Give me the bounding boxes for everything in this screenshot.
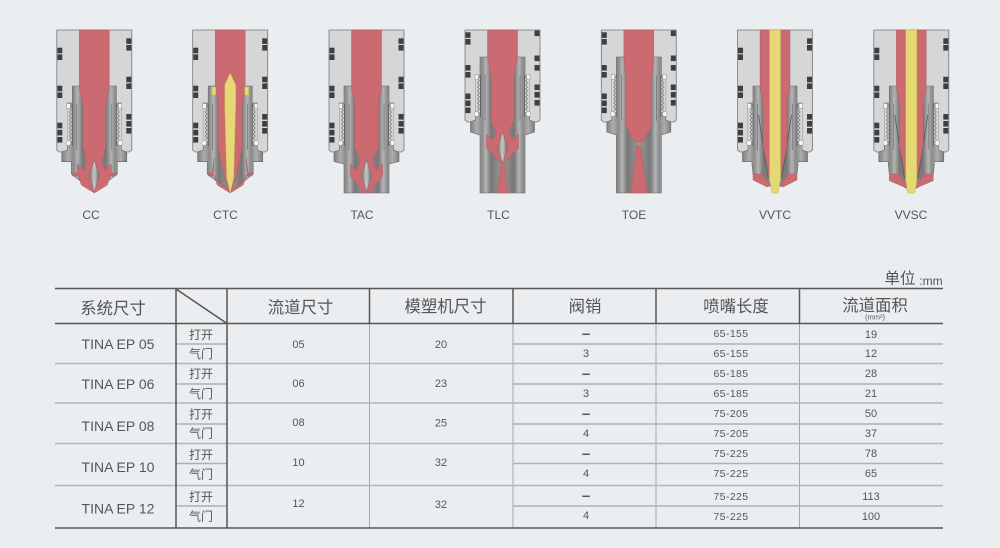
nozzle diagram: CTC [193, 30, 268, 193]
thread detail [883, 104, 940, 150]
table header: 模塑机尺寸 [405, 298, 486, 316]
unit note [884, 270, 943, 288]
nozzle body [607, 57, 671, 193]
thread detail [66, 104, 123, 150]
row: TINA EP 10: 4 [583, 468, 589, 480]
row: TINA EP 05: 12 [865, 348, 877, 360]
nozzle diagram: TAC [329, 30, 404, 193]
row: TINA EP 06: 28 [865, 368, 877, 380]
row: TINA EP 06: 65-185 [713, 368, 749, 380]
row: TINA EP 05: 20 [435, 339, 447, 351]
row: TINA EP 10: 78 [865, 448, 877, 460]
nozzle diagram: TOE [601, 30, 676, 193]
inner lines [895, 115, 928, 178]
torpedo [362, 160, 372, 191]
row: TINA EP 05: TINA EP 05 [82, 336, 155, 352]
row: TINA EP 05: 65-155 [713, 348, 749, 360]
row: TINA EP 08: 75-205 [713, 408, 749, 420]
table grid [55, 288, 943, 528]
melt channel [72, 30, 116, 193]
nozzle body [879, 86, 944, 188]
row: TINA EP 06: – [582, 366, 590, 382]
nozzle diagram: VVTC [738, 30, 812, 193]
valve pin [906, 30, 917, 193]
row: TINA EP 06 [82, 366, 877, 401]
melt channel [760, 30, 790, 178]
torpedo [498, 132, 508, 163]
housing [329, 30, 404, 152]
row: TINA EP 05: 气门 [189, 346, 213, 361]
tip right [914, 174, 933, 193]
nozzle body [470, 57, 534, 193]
thread detail [747, 104, 803, 150]
row: TINA EP 10: 32 [435, 457, 447, 469]
row: TINA EP 05 [82, 326, 877, 361]
thread detail [610, 74, 667, 121]
nozzle diagram: VVSC [874, 30, 949, 193]
row: TINA EP 05: 65-155 [713, 328, 749, 340]
label: TAC: TAC [350, 208, 374, 222]
row: TINA EP 10: 打开 [189, 448, 213, 462]
nozzle body [334, 86, 399, 193]
melt channel [896, 30, 926, 178]
row: TINA EP 12: 75-225 [713, 491, 749, 503]
tip left [753, 174, 770, 187]
label: TLC: TLC [487, 208, 510, 222]
row: TINA EP 06: 21 [865, 388, 877, 400]
row: TINA EP 12 [82, 488, 880, 524]
row: TINA EP 12: 气门 [189, 508, 213, 524]
row: TINA EP 08: – [582, 406, 590, 422]
row: TINA EP 08 [82, 406, 877, 440]
housing [601, 30, 676, 122]
tip right [780, 174, 797, 187]
housing [193, 30, 268, 152]
row: TINA EP 10: 气门 [189, 466, 213, 482]
row: TINA EP 08: 08 [292, 417, 305, 429]
table header: 阀销 [569, 298, 601, 316]
row: TINA EP 10: – [582, 446, 590, 462]
row: TINA EP 08: 50 [865, 408, 877, 420]
row: TINA EP 05: 打开 [189, 328, 213, 342]
row: TINA EP 12: 12 [292, 498, 305, 510]
row: TINA EP 12: 4 [583, 510, 589, 522]
label: VVTC: VVTC [759, 208, 791, 222]
melt channel [215, 30, 245, 192]
melt channel [350, 30, 382, 193]
label: VVSC: VVSC [895, 208, 928, 222]
row: TINA EP 05: 19 [865, 329, 877, 341]
row: TINA EP 06: TINA EP 06 [82, 376, 155, 392]
thread detail [338, 104, 395, 150]
torpedo [89, 160, 99, 192]
row: TINA EP 12: TINA EP 12 [82, 500, 155, 516]
row: TINA EP 10: 75-225 [713, 448, 749, 460]
table header: 喷嘴长度 [703, 298, 769, 316]
label: CC: CC [82, 208, 100, 222]
row: TINA EP 10: TINA EP 10 [82, 459, 155, 475]
label: TOE: TOE [622, 208, 646, 222]
thread detail [474, 74, 531, 121]
inner lines [758, 115, 792, 178]
row: TINA EP 08: 37 [865, 428, 877, 440]
table header: 流道面积 [842, 297, 908, 315]
table header [80, 297, 908, 322]
melt channel upper [624, 30, 654, 142]
row: TINA EP 12: 113 [862, 491, 880, 503]
row: TINA EP 12: 100 [862, 511, 880, 523]
tip left [889, 174, 909, 193]
row: TINA EP 08: 75-205 [713, 428, 749, 440]
row: TINA EP 05: – [582, 326, 590, 342]
row: TINA EP 08: 打开 [189, 408, 213, 422]
row: TINA EP 08: 气门 [189, 426, 213, 440]
thread detail [202, 104, 259, 150]
unit note: 单位 [884, 270, 916, 288]
row: TINA EP 10: 75-225 [713, 468, 749, 480]
label: CTC: CTC [213, 208, 238, 222]
melt channel lower [630, 146, 647, 193]
row: TINA EP 10: 10 [292, 457, 305, 469]
row: TINA EP 06: 65-185 [713, 388, 749, 400]
nozzle body [62, 86, 127, 192]
tip shell [208, 158, 252, 193]
housing [465, 30, 540, 122]
specification table [55, 288, 943, 528]
row: TINA EP 08: 4 [583, 428, 589, 440]
row: TINA EP 08: TINA EP 08 [82, 418, 155, 434]
housing [874, 30, 949, 152]
heated pin [225, 73, 236, 193]
row: TINA EP 10: 65 [865, 468, 877, 480]
table header: 流道尺寸 [268, 299, 333, 317]
right seal [245, 87, 249, 95]
row: TINA EP 10 [82, 446, 877, 482]
row: TINA EP 12: 打开 [189, 490, 213, 504]
melt channel [486, 30, 518, 193]
valve pin [770, 30, 780, 193]
housing [738, 30, 812, 152]
nozzle body [742, 86, 808, 186]
housing [57, 30, 132, 152]
nozzle body [198, 86, 263, 192]
nozzle diagram: TLC [465, 30, 540, 193]
row: TINA EP 12: 32 [435, 499, 447, 511]
row: TINA EP 12: 75-225 [713, 511, 749, 523]
row: TINA EP 05: 3 [583, 348, 589, 360]
table header: 系统尺寸 [80, 300, 146, 318]
table header: (mm²) [865, 312, 885, 322]
row: TINA EP 06: 3 [583, 388, 589, 400]
row: TINA EP 06: 23 [435, 378, 447, 390]
left seal [212, 87, 216, 95]
row: TINA EP 06: 气门 [189, 386, 213, 401]
row: TINA EP 08: 25 [435, 418, 447, 430]
row: TINA EP 12: – [582, 488, 590, 504]
row: TINA EP 06: 06 [292, 378, 305, 390]
nozzle diagram: CC [57, 30, 132, 193]
row: TINA EP 05: 05 [292, 339, 305, 351]
unit note: :mm [919, 274, 943, 288]
row: TINA EP 06: 打开 [189, 367, 213, 381]
